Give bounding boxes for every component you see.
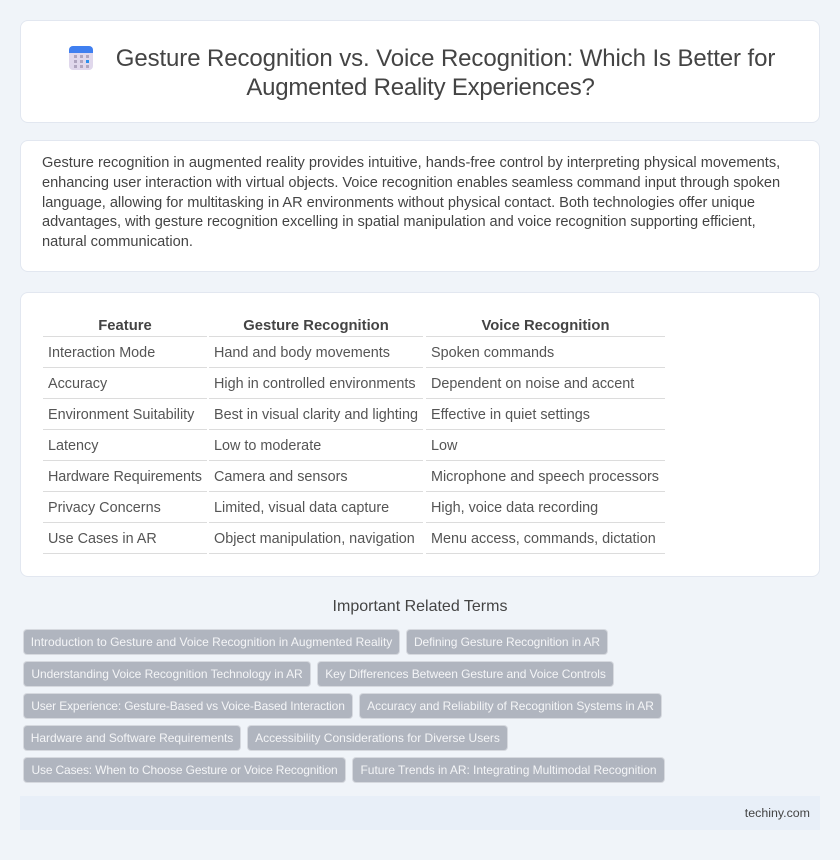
header card [20, 20, 820, 123]
footer text: techiny.com [745, 806, 810, 820]
row: Use Cases in AR [43, 531, 665, 554]
panel: comparison table: Camera and sensors [214, 469, 348, 485]
header cell: Gesture Recognition [209, 313, 423, 337]
tag: Use Cases: When to Choose Gesture or Voice Recognition [31, 763, 338, 777]
tag: Key Differences Between Gesture and Voice Controls [325, 667, 606, 681]
panel: comparison table: Best in visual clarity and lighting [214, 407, 418, 423]
header cell: Gesture Recognition: Gesture Recognition [243, 318, 389, 334]
tag: Accuracy and Reliability of Recognition Systems in AR [367, 699, 654, 713]
panel: comparison table: Effective in quiet settings [431, 407, 590, 423]
intro paragraph: language, allowing for multitasking in AR environments without physical contact. Both technologies offer unique [42, 195, 755, 211]
tag [24, 758, 345, 782]
row: Environment Suitability [43, 407, 665, 430]
tag [24, 662, 310, 686]
panel: comparison table: High, voice data recording [431, 500, 598, 516]
tag: Introduction to Gesture and Voice Recognition in Augmented Reality [31, 635, 392, 649]
intro paragraph: natural communication. [42, 234, 193, 250]
icon: calendar [69, 46, 93, 70]
panel: comparison table: Low [431, 438, 457, 454]
tag [318, 662, 613, 686]
panel: comparison table: Use Cases in AR [48, 531, 157, 547]
row: Accuracy [43, 376, 665, 399]
tag [407, 630, 607, 654]
title: Gesture Recognition vs. Voice Recognition: Which Is Better for [116, 45, 775, 72]
header cell: Feature [43, 313, 207, 337]
panel: comparison table: Limited, visual data capture [214, 500, 389, 516]
panel: comparison table [20, 292, 820, 577]
panel: comparison table: Dependent on noise and accent [431, 376, 634, 392]
tag [248, 726, 507, 750]
footer bar [20, 796, 820, 830]
panel: comparison table: Privacy Concerns [48, 500, 161, 516]
tag [353, 758, 664, 782]
panel: comparison table: Hand and body movements [214, 345, 390, 361]
intro paragraph [42, 155, 780, 250]
panel: comparison table: Low to moderate [214, 438, 321, 454]
panel: comparison table: Environment Suitability [48, 407, 194, 423]
tag [24, 694, 352, 718]
tag: Accessibility Considerations for Diverse Users [255, 731, 500, 745]
panel: comparison table: Latency [48, 438, 98, 454]
row: Interaction Mode [43, 345, 665, 368]
row: Hardware Requirements [43, 469, 665, 492]
intro paragraph: Gesture recognition in augmented reality provides intuitive, hands-free control by interpreting physical movements, [42, 155, 780, 171]
panel: comparison table: Spoken commands [431, 345, 554, 361]
header cell: Feature: Feature [98, 318, 152, 334]
panel: comparison table: Microphone and speech processors [431, 469, 659, 485]
panel: comparison table: Object manipulation, navigation [214, 531, 415, 547]
panel: intro text [20, 140, 820, 272]
title: Augmented Reality Experiences? [246, 74, 595, 101]
tag: User Experience: Gesture-Based vs Voice-Based Interaction [31, 699, 345, 713]
header cell: Voice Recognition [426, 313, 665, 337]
intro paragraph: advantages, with gesture recognition excelling in spatial manipulation and voice recognition supporting efficient, [42, 214, 756, 230]
heading: Important Related Terms: Important Related Terms [333, 598, 507, 615]
tag: Future Trends in AR: Integrating Multimodal Recognition [361, 763, 656, 777]
tag [24, 630, 399, 654]
panel: comparison table: Interaction Mode [48, 345, 155, 361]
tag: Defining Gesture Recognition in AR [414, 635, 600, 649]
tag: Hardware and Software Requirements [31, 731, 233, 745]
row: Privacy Concerns [43, 500, 665, 523]
tag [360, 694, 661, 718]
panel: comparison table: High in controlled environments [214, 376, 416, 392]
header cell: Voice Recognition: Voice Recognition [482, 318, 609, 334]
tag [24, 726, 240, 750]
panel: comparison table: Hardware Requirements [48, 469, 202, 485]
panel: comparison table: Menu access, commands, dictation [431, 531, 656, 547]
row: Latency [43, 438, 665, 461]
title [116, 45, 775, 101]
tag: Understanding Voice Recognition Technology in AR [31, 667, 303, 681]
panel: comparison table: Accuracy [48, 376, 107, 392]
intro paragraph: enhancing user interaction with virtual objects. Voice recognition enables seamless command input through spoken [42, 175, 780, 191]
